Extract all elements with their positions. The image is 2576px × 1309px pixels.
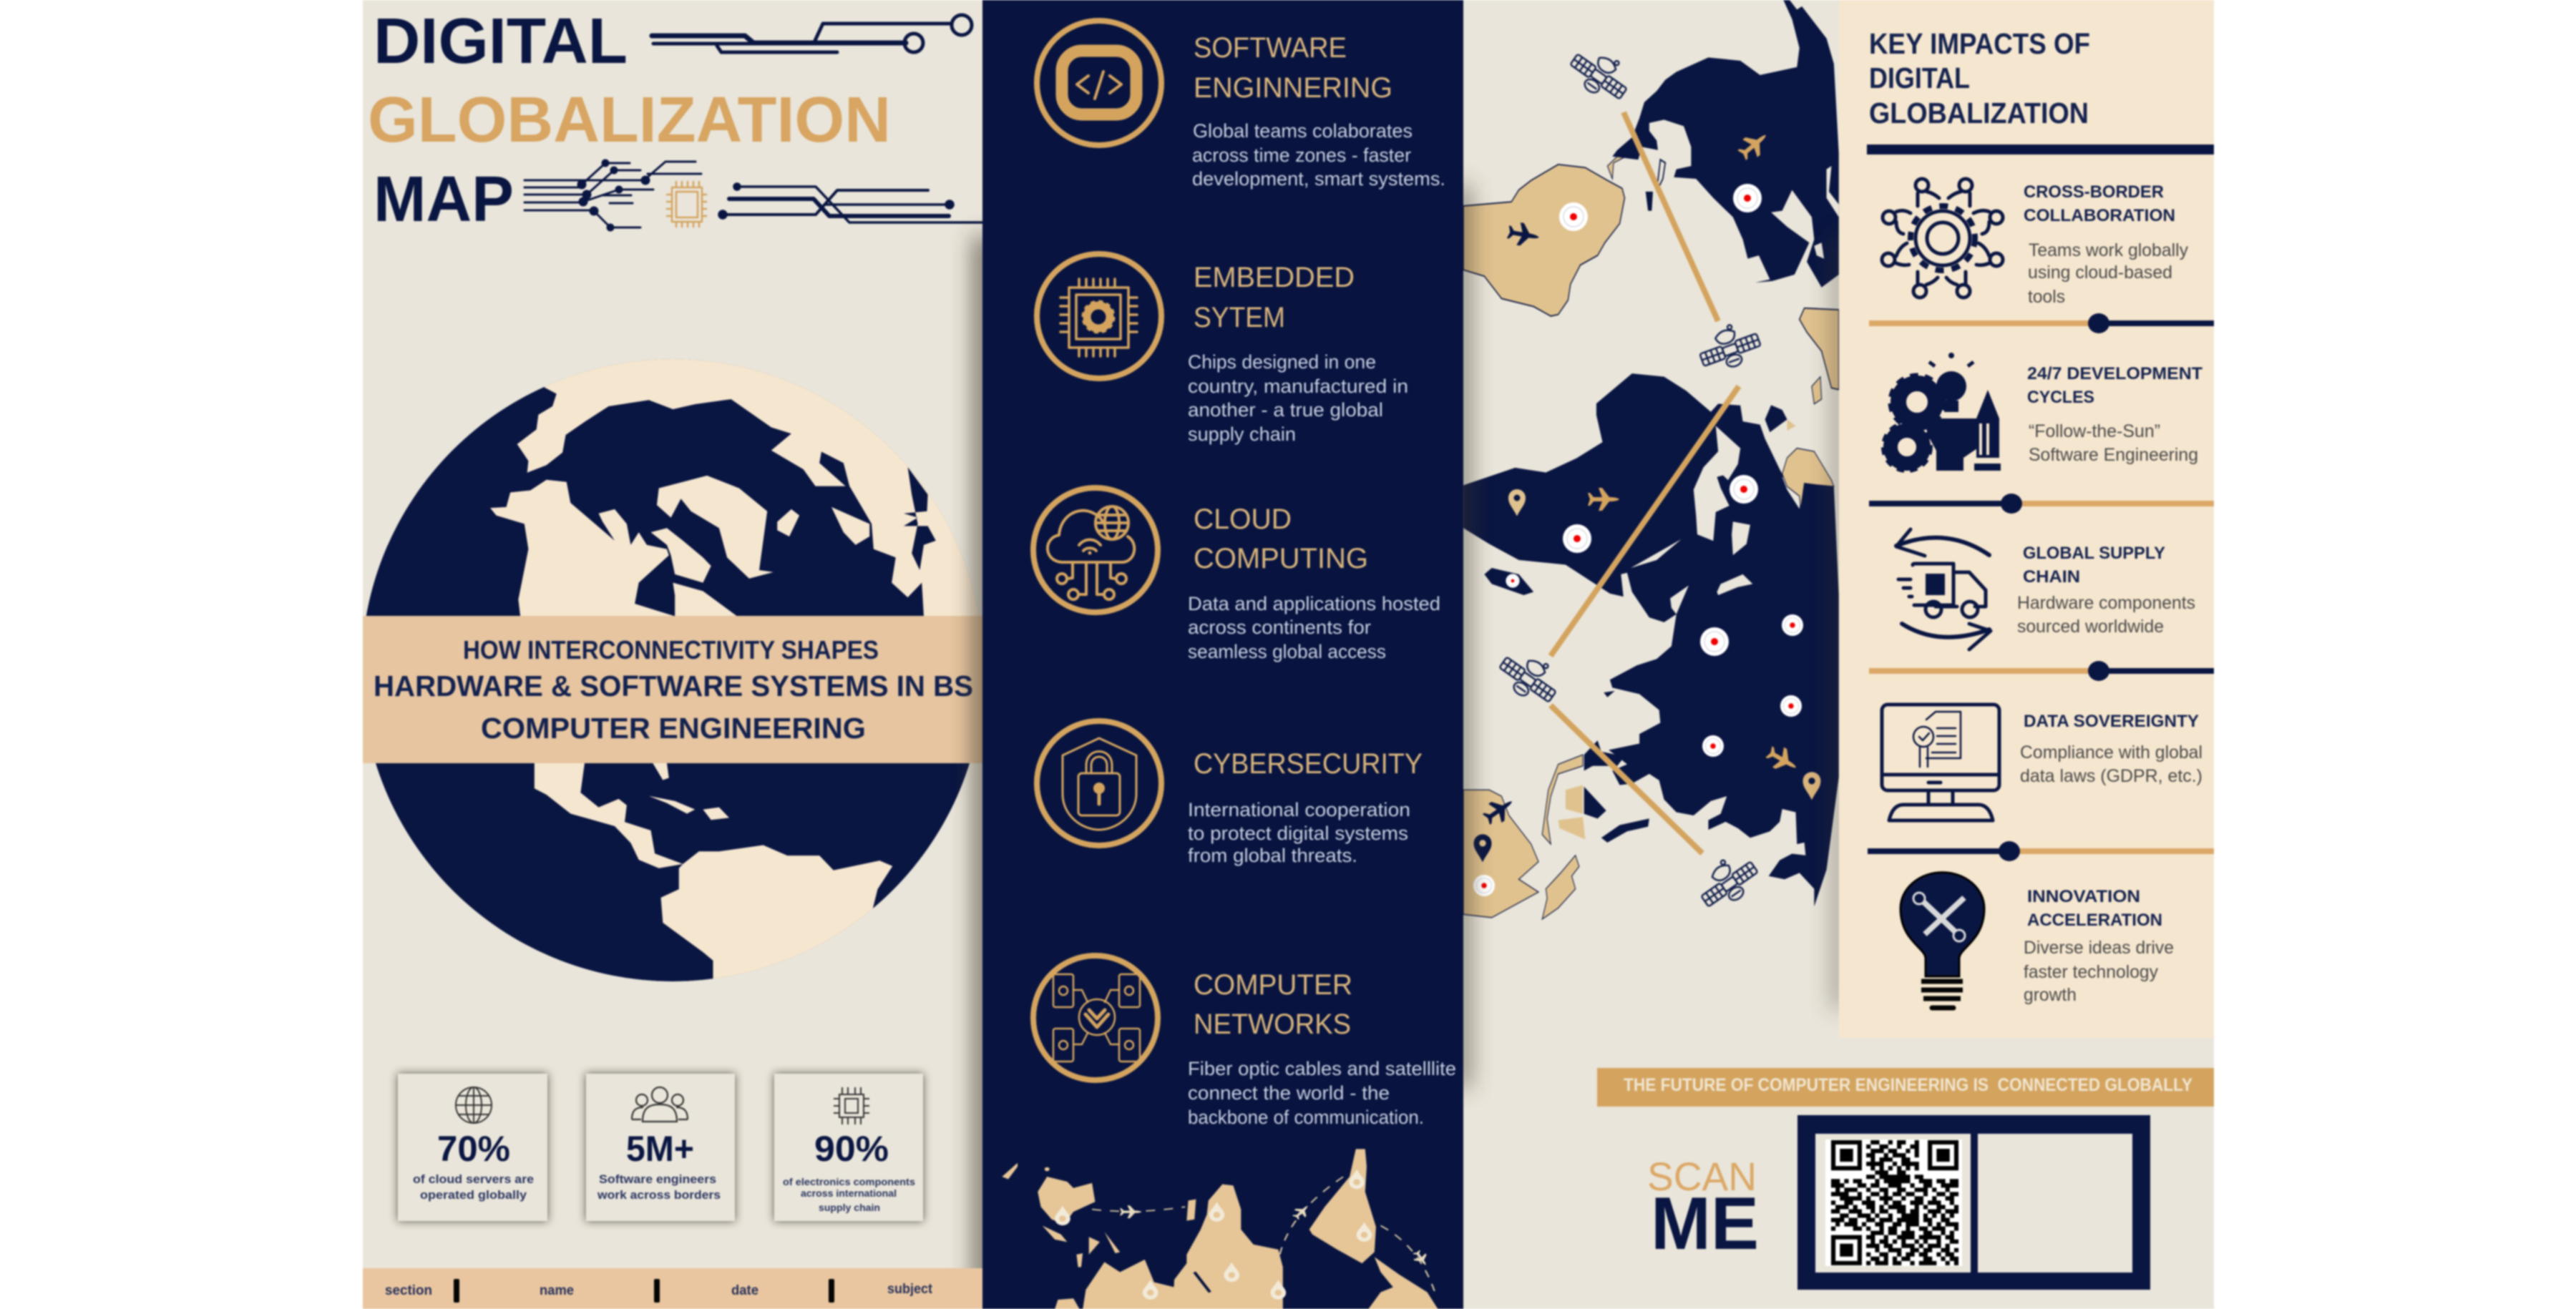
- description: from global threats.: [1188, 845, 1357, 866]
- heading: NETWORKS: [1194, 1009, 1351, 1040]
- icon: globe: [456, 1087, 492, 1123]
- item title: ACCELERATION: [2027, 911, 2162, 930]
- divider 4: [1868, 841, 2214, 861]
- item text: Software Engineering: [2029, 445, 2198, 465]
- QR code frame: [1797, 1115, 2150, 1290]
- scan me label: ME: [1651, 1182, 1759, 1265]
- description: Chips designed in one: [1188, 351, 1376, 373]
- impact: innovation acceleration: [1901, 873, 2174, 1008]
- icon: satellites: [1493, 40, 1765, 916]
- stat text: across international: [801, 1187, 897, 1199]
- heading: COMPUTER: [1194, 969, 1352, 1001]
- topic: computer networks: [1033, 956, 1456, 1128]
- heading: SOFTWARE: [1194, 32, 1347, 64]
- title: MAP: MAP: [374, 164, 514, 235]
- heading: CLOUD: [1194, 504, 1292, 535]
- topic: cloud computing: [1033, 488, 1440, 662]
- icon: code window: [1037, 21, 1161, 145]
- connection line 2: [1551, 386, 1739, 656]
- heading: DIGITAL: [1869, 62, 1970, 94]
- footer labels: section: [385, 1283, 432, 1298]
- heading: CYBERSECURITY: [1194, 748, 1423, 780]
- title: DIGITAL: DIGITAL: [374, 6, 628, 77]
- item text: growth: [2024, 985, 2077, 1005]
- item title: COLLABORATION: [2024, 206, 2175, 225]
- circuit decoration right of chip: [719, 184, 982, 222]
- item text: using cloud-based: [2028, 263, 2172, 283]
- heading: ENGINNERING: [1194, 72, 1392, 104]
- closing banner: [1597, 1068, 2214, 1107]
- item text: Hardware components: [2017, 593, 2195, 613]
- panel: key impacts: [1839, 0, 2214, 1038]
- footer labels: name: [540, 1283, 574, 1298]
- description: seamless global access: [1188, 641, 1386, 662]
- icon: map pins: [1474, 489, 1820, 862]
- footer labels: subject: [887, 1282, 933, 1297]
- subtitle line 3: COMPUTER ENGINEERING: [481, 712, 866, 745]
- stat text: work across borders: [597, 1188, 721, 1202]
- footer band: [363, 1268, 982, 1309]
- item title: GLOBAL SUPPLY: [2023, 544, 2165, 563]
- icon: gears bulb pencil: [1884, 353, 2001, 471]
- land: tan continent left: [1463, 0, 1839, 404]
- connection line 1: [1624, 112, 1718, 321]
- description: across continents for: [1188, 617, 1371, 638]
- item title: CYCLES: [2027, 388, 2094, 407]
- divider 3: [1869, 661, 2214, 681]
- topic: embedded system: [1037, 254, 1408, 445]
- scan me label: SCAN: [1647, 1154, 1757, 1199]
- map edge shadows: [1453, 186, 1846, 1087]
- icon: location targets: [1473, 184, 1803, 896]
- description: to protect digital systems: [1188, 823, 1408, 844]
- impact: global supply chain: [1896, 529, 2195, 649]
- stat text: of cloud servers are: [413, 1172, 534, 1186]
- item text: tools: [2028, 287, 2065, 307]
- panel: topics column: [982, 0, 1463, 1309]
- icon: cloud network: [1033, 488, 1158, 612]
- stat card: 5M+: [586, 1074, 735, 1221]
- icon: network devices: [1033, 956, 1158, 1080]
- item text: Teams work globally: [2029, 240, 2188, 260]
- heading: COMPUTING: [1194, 543, 1368, 574]
- icon: gear with people: [1882, 179, 2003, 298]
- circuit decoration top: [652, 15, 972, 52]
- impact: 24/7 development cycles: [1884, 353, 2202, 471]
- globe illustration: [365, 359, 974, 983]
- icon: chip gear: [1037, 254, 1161, 378]
- panel: world map: [1453, 0, 2214, 1309]
- icon: monitor with document: [1882, 705, 1999, 820]
- subtitle band: [363, 616, 982, 763]
- icon: people: [632, 1087, 688, 1122]
- stat value: 90%: [814, 1129, 889, 1169]
- impact: data sovereignty: [1882, 705, 2202, 820]
- stat value: 5M+: [626, 1129, 694, 1169]
- description: supply chain: [1188, 423, 1296, 445]
- QR code: [1831, 1140, 1958, 1265]
- divider 2: [1869, 494, 2214, 514]
- item text: “Follow-the-Sun”: [2029, 421, 2160, 441]
- item title: INNOVATION: [2027, 887, 2140, 906]
- stat text: Software engineers: [599, 1172, 716, 1186]
- mini world map: [1002, 1149, 1438, 1309]
- description: Fiber optic cables and satelllite: [1188, 1058, 1456, 1079]
- stat card: 90%: [774, 1074, 923, 1221]
- item title: DATA SOVEREIGNTY: [2024, 712, 2199, 731]
- icon: truck with arrows: [1896, 529, 1991, 649]
- description: development, smart systems.: [1192, 168, 1445, 190]
- icon: orange chip: [667, 182, 706, 227]
- description: another - a true global: [1188, 399, 1383, 421]
- item text: sourced worldwide: [2017, 617, 2164, 637]
- item title: CHAIN: [2023, 567, 2080, 587]
- description: Data and applications hosted: [1188, 593, 1440, 614]
- land: tan right fragments: [1800, 308, 1839, 390]
- banner text: THE FUTURE OF COMPUTER ENGINEERING IS CONNECTED GLOBALLY: [1624, 1075, 2192, 1095]
- description: International cooperation: [1188, 799, 1410, 820]
- land: tan lower left: [1463, 790, 1538, 918]
- footer labels: date: [731, 1283, 758, 1298]
- item text: faster technology: [2024, 962, 2158, 982]
- description: across time zones - faster: [1192, 144, 1411, 166]
- item title: CROSS-BORDER: [2024, 182, 2164, 202]
- title: GLOBALIZATION: GLOBALIZATION: [368, 84, 891, 156]
- subtitle line 1: HOW INTERCONNECTIVITY SHAPES: [463, 635, 879, 665]
- description: country, manufactured in: [1188, 376, 1408, 397]
- item text: Diverse ideas drive: [2024, 938, 2174, 958]
- description: Global teams colaborates: [1193, 120, 1413, 142]
- circuit decoration left of chip: [525, 160, 701, 230]
- heading: KEY IMPACTS OF: [1869, 27, 2090, 60]
- item text: Compliance with global: [2020, 742, 2202, 763]
- impact: cross-border collaboration: [1882, 179, 2188, 307]
- divider 1: [1869, 313, 2214, 333]
- icon: planes: [1480, 127, 1802, 829]
- land: navy top right: [1612, 0, 1839, 288]
- stat text: of electronics components: [783, 1176, 915, 1187]
- description: connect the world - the: [1188, 1082, 1390, 1104]
- topic: cybersecurity: [1037, 721, 1423, 866]
- connection line 3: [1551, 705, 1702, 853]
- icon: processor: [834, 1087, 869, 1124]
- stat value: 70%: [437, 1129, 510, 1169]
- icon: bulb with tools: [1901, 873, 1984, 1008]
- heading: EMBEDDED: [1194, 262, 1355, 293]
- stat text: operated globally: [420, 1188, 527, 1202]
- stat card: 70%: [398, 1074, 547, 1221]
- description: backbone of communication.: [1188, 1107, 1424, 1128]
- panel: left cover: [361, 0, 1000, 1309]
- item title: 24/7 DEVELOPMENT: [2027, 364, 2202, 383]
- nav edge shadow on left panel: [975, 236, 993, 1309]
- item text: data laws (GDPR, etc.): [2020, 766, 2202, 786]
- icon: shield padlock: [1037, 721, 1161, 845]
- subtitle line 2: HARDWARE & SOFTWARE SYSTEMS IN BS: [374, 670, 973, 702]
- heading: SYTEM: [1194, 302, 1285, 333]
- topic: software engineering: [1037, 21, 1445, 190]
- stat text: supply chain: [819, 1202, 880, 1213]
- heading: GLOBALIZATION: [1869, 97, 2089, 129]
- land: central navy mass: [1463, 373, 1839, 919]
